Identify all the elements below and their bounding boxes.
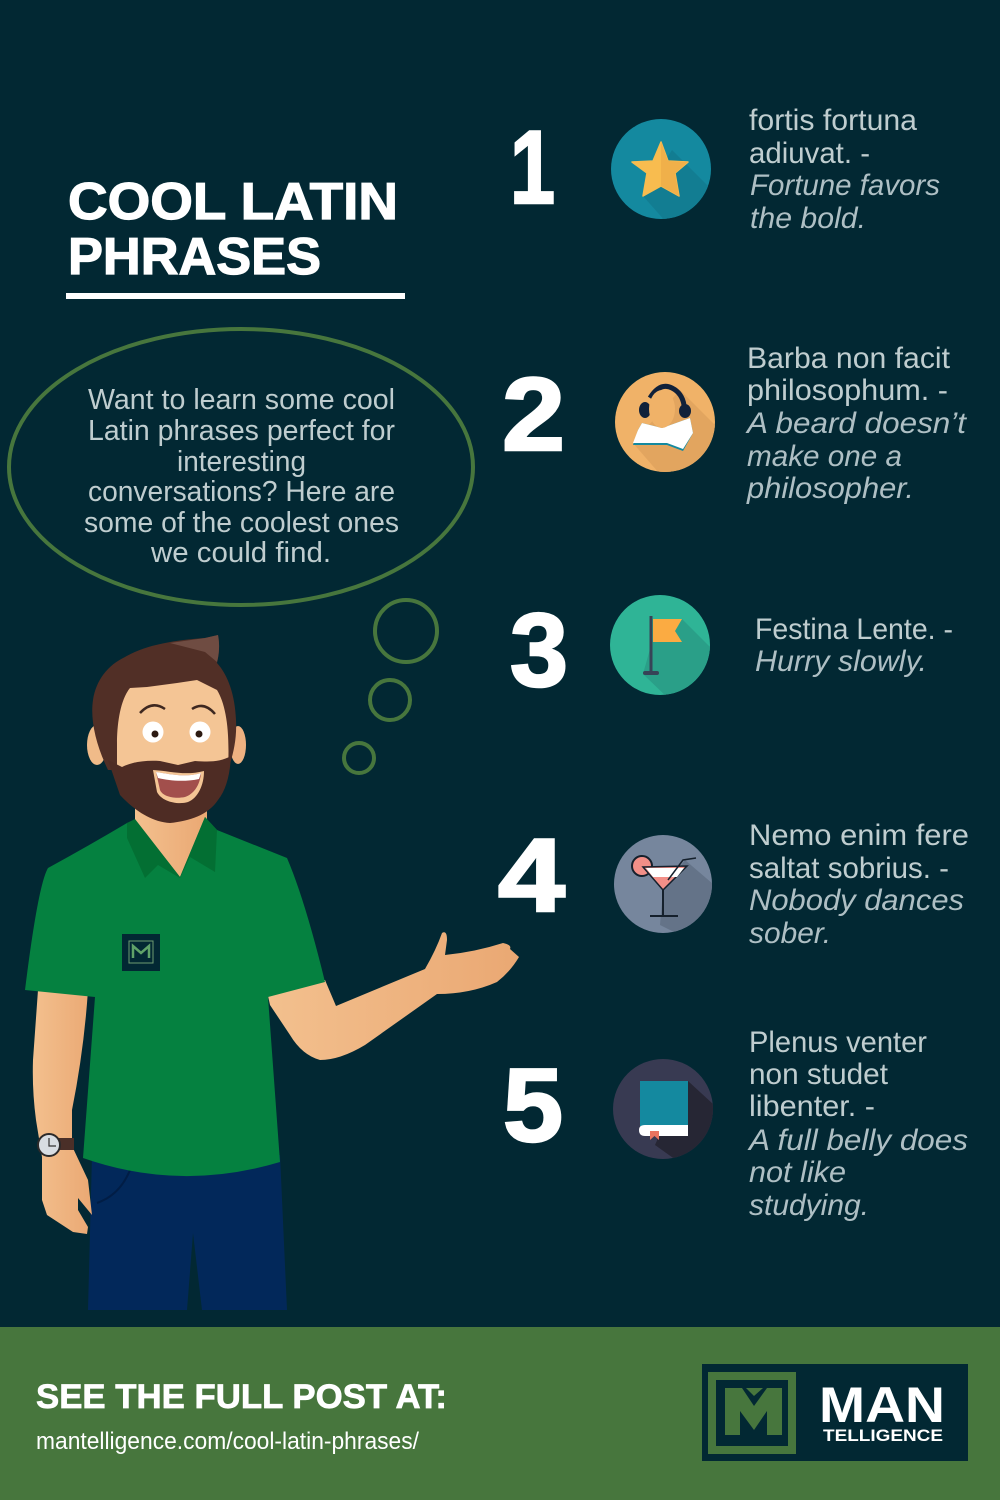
phrase 4: saltat sobrius. - (749, 852, 949, 885)
icon: philosopher (615, 372, 715, 472)
trousers (88, 1155, 287, 1310)
phrase 3: Hurry slowly. (755, 645, 927, 678)
phrase 5 (747, 1026, 968, 1222)
icon: book (613, 1059, 713, 1159)
thought bubble with intro text: interesting (177, 446, 306, 478)
phrase 5: studying. (749, 1189, 869, 1222)
thought bubble trail (344, 600, 437, 773)
item 4 (498, 818, 969, 950)
collar (127, 817, 217, 878)
phrase 5: Plenus venter (749, 1026, 927, 1059)
face (117, 680, 229, 800)
phrase 1: the bold. (750, 202, 866, 235)
thought bubble with intro text (9, 329, 473, 605)
phrase 5: non studet (749, 1058, 889, 1091)
item 3 (511, 595, 952, 695)
logo: Mantelligence: MAN (819, 1377, 945, 1433)
eyes (142, 722, 210, 742)
thought bubble with intro text: conversations? Here are (88, 476, 395, 508)
logo: Mantelligence (702, 1364, 968, 1461)
number 3: 3 (510, 593, 568, 709)
thought bubble with intro text: we could find. (150, 537, 331, 569)
mouth (153, 770, 204, 803)
phrase 1: Fortune favors (750, 169, 940, 202)
title: COOL LATIN (68, 173, 398, 231)
phrase 2: philosopher. (746, 472, 914, 505)
phrase 4: Nemo enim fere (749, 819, 969, 852)
phrase 5: not like (749, 1156, 846, 1189)
icon: star (611, 119, 711, 219)
phrase 1: adiuvat. - (749, 137, 870, 170)
left arm and hand (33, 990, 92, 1234)
watch (38, 1134, 74, 1156)
thought bubble with intro text: some of the coolest ones (84, 507, 399, 539)
shirt (25, 817, 325, 1176)
phrase 3 (755, 613, 953, 678)
hair (92, 635, 236, 770)
footer call to action: SEE THE FULL POST AT: (36, 1378, 447, 1416)
phrase 2 (745, 342, 968, 505)
phrase 3: Festina Lente. - (755, 613, 953, 646)
item 1 (514, 108, 940, 228)
item 2 (502, 342, 968, 505)
shirt badge (122, 934, 160, 971)
phrase 5: A full belly does (747, 1124, 968, 1157)
number 5: 5 (503, 1048, 563, 1164)
phrase 2: philosophum. - (747, 374, 948, 407)
beard (108, 756, 231, 823)
character: man in green polo (25, 635, 519, 1310)
title: PHRASES (68, 228, 321, 286)
eyebrows (140, 705, 215, 714)
phrase 4: sober. (749, 917, 831, 950)
title (66, 173, 405, 299)
number 1: 1 (510, 110, 555, 226)
thought bubble with intro text: Want to learn some cool (88, 384, 395, 416)
phrase 4 (749, 819, 969, 950)
phrase 2: Barba non facit (747, 342, 951, 375)
icon: flag (610, 595, 710, 695)
ears (87, 725, 107, 765)
number 4: 4 (498, 818, 565, 934)
number 2: 2 (502, 357, 565, 473)
phrase 1 (749, 104, 940, 235)
phrase 4: Nobody dances (749, 884, 964, 917)
logo: Mantelligence: TELLIGENCE (823, 1426, 943, 1445)
thought bubble with intro text: Latin phrases perfect for (88, 415, 395, 447)
neck (135, 790, 207, 880)
phrase 1: fortis fortuna (749, 104, 917, 137)
icon: cocktail (614, 835, 712, 933)
phrase 5: libenter. - (749, 1090, 875, 1123)
phrase 2: A beard doesn’t (745, 407, 968, 440)
phrase 2: make one a (747, 440, 902, 473)
item 5 (503, 1026, 968, 1222)
footer url: mantelligence.com/cool-latin-phrases/ (36, 1428, 419, 1455)
right arm and hand (268, 932, 519, 1060)
footer band (0, 1327, 1000, 1500)
